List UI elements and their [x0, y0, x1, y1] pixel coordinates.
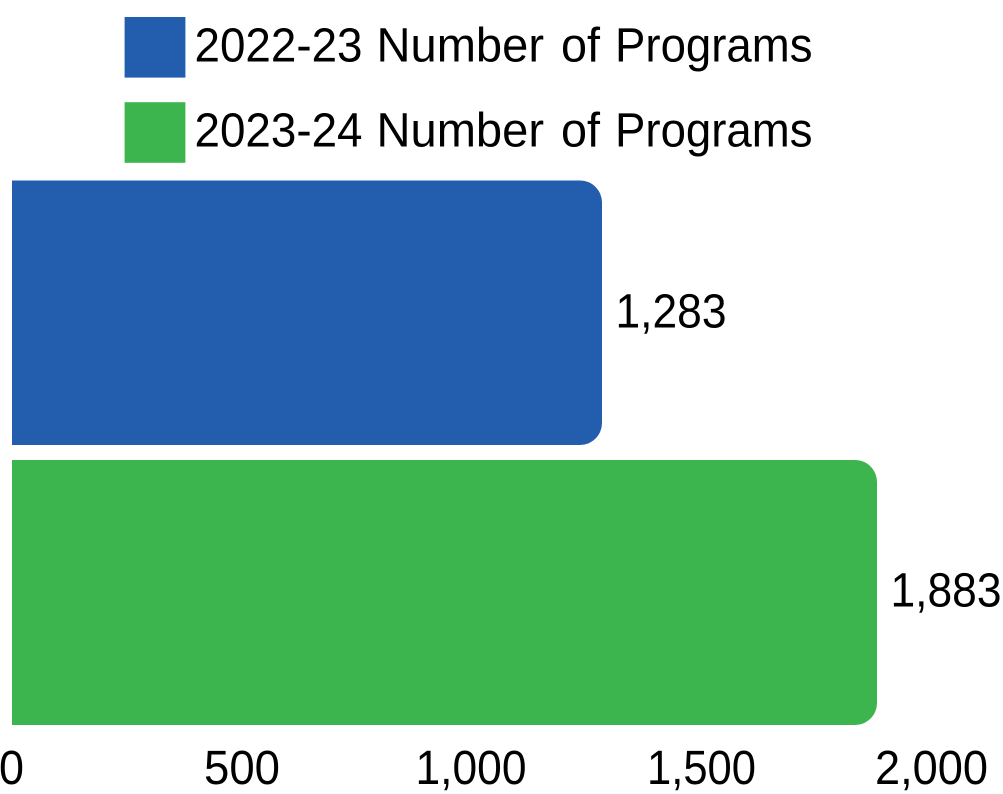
x axis labels: [0, 742, 988, 794]
legend label: 2022-23: 2022-23: [194, 20, 362, 72]
axis tick: 1,000: 1,000: [416, 742, 526, 794]
bar: 2023-24: [12, 460, 877, 725]
bar: 2022-23: [12, 180, 602, 445]
axis tick: 1,500: 1,500: [647, 742, 756, 794]
value label: 1,283: 1,283: [616, 286, 726, 338]
legend label: 2022-23: Programs: [615, 20, 812, 72]
legend label: 2023-24: 2023-24: [194, 104, 362, 158]
legend swatch: 2022-23: [125, 17, 185, 78]
legend label: 2023-24: Programs: [615, 104, 812, 158]
legend label: 2023-24: of: [561, 104, 601, 158]
legend label: 2023-24: Number: [376, 104, 544, 158]
legend swatch: 2023-24: [125, 102, 185, 163]
legend: [125, 17, 813, 163]
axis tick: 500: 500: [204, 742, 280, 794]
axis tick: 2,000: 2,000: [875, 742, 988, 794]
legend label: 2022-23: Number: [376, 20, 544, 72]
legend label: 2022-23: of: [561, 20, 601, 72]
